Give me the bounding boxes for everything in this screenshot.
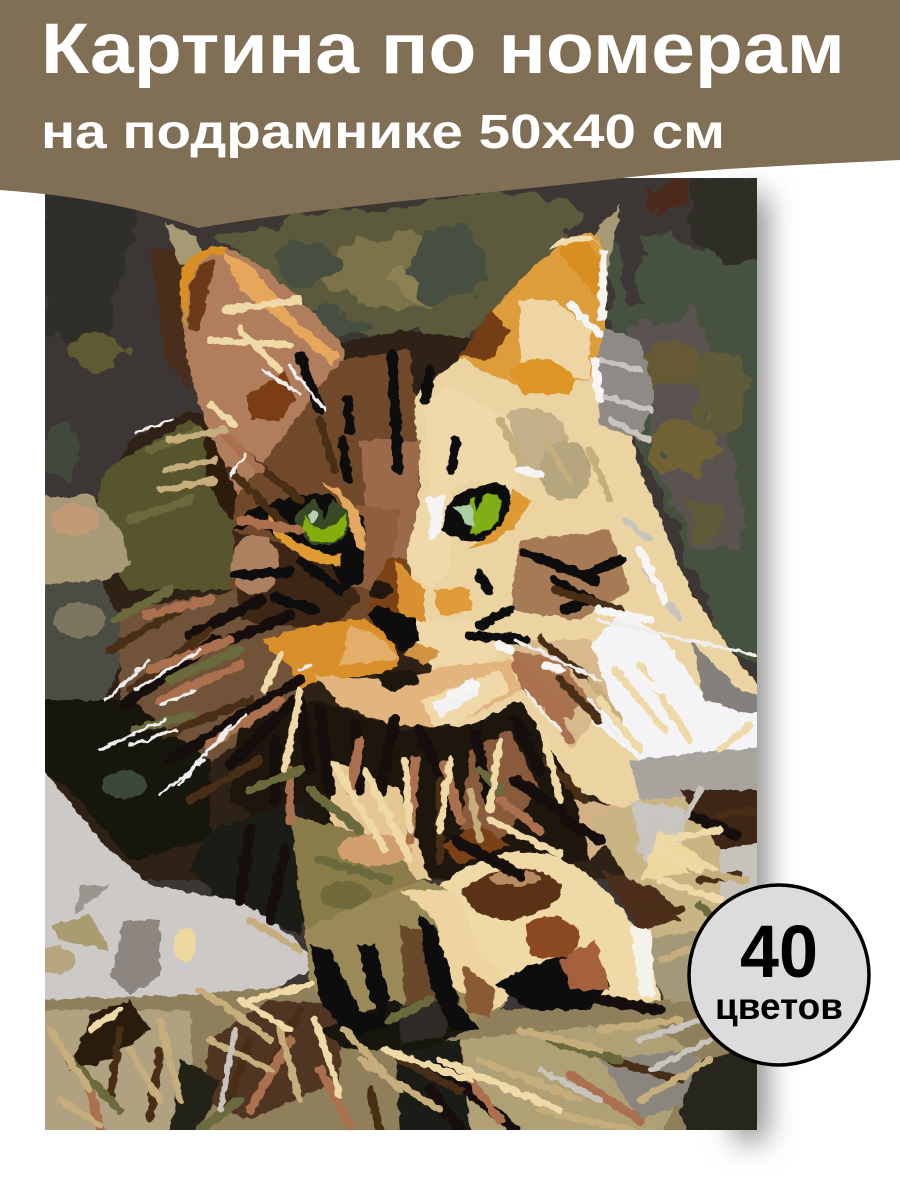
banner bbox=[0, 0, 900, 228]
left ear bbox=[165, 205, 620, 520]
face markings bbox=[235, 355, 620, 640]
chest and neck fur bbox=[189, 700, 590, 936]
right side of cat bbox=[410, 325, 770, 860]
right ear bbox=[460, 233, 607, 395]
fur strokes: cream bbox=[90, 300, 750, 1110]
canvas side shadow bbox=[735, 195, 765, 1140]
cat body fur bbox=[45, 248, 700, 882]
left eye bbox=[232, 482, 365, 590]
badge: 40 colours: 40 bbox=[740, 910, 818, 993]
title: Картина по номерам bbox=[41, 10, 845, 89]
face bbox=[230, 350, 520, 727]
lower fur bbox=[45, 984, 757, 1130]
subtitle: на подрамнике 50х40 см bbox=[41, 106, 725, 159]
painting background bbox=[40, 178, 770, 680]
left paw bbox=[305, 880, 530, 1050]
fur strokes: olive bbox=[70, 430, 740, 1130]
white fluff left bbox=[45, 772, 310, 1001]
fur strokes: cheek white and grey bbox=[220, 360, 710, 1110]
right eye bbox=[428, 484, 530, 548]
right paw bbox=[440, 852, 660, 1010]
badge: 40 colours bbox=[689, 885, 869, 1065]
fur strokes: rust bbox=[90, 430, 640, 1130]
fur strokes: tan bbox=[50, 420, 745, 1130]
fur strokes: black bbox=[125, 600, 735, 1130]
right fur mass bbox=[590, 789, 757, 1004]
painting: cat by numbers bbox=[30, 178, 770, 1145]
fur strokes: dark brown bbox=[110, 420, 760, 1130]
whiskers bbox=[100, 365, 755, 795]
badge: 40 colours: цветов bbox=[715, 986, 843, 1027]
